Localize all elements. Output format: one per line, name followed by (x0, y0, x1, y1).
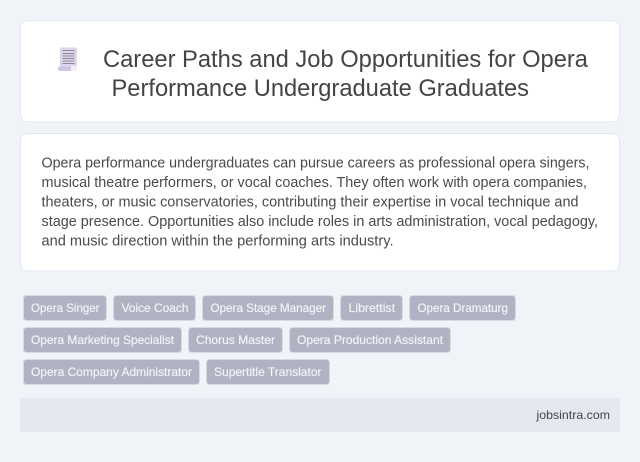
summary text: and music direction within the performing arts industry. (42, 232, 394, 250)
title: Performance Undergraduate Graduates (112, 75, 529, 102)
summary text: theaters, or music conservatories, contributing their expertise in vocal technique and (42, 194, 578, 210)
tag: Opera Dramaturg: Opera Dramaturg (418, 301, 508, 315)
title: Career Paths and Job Opportunities for Opera (103, 46, 589, 73)
tag: Chorus Master: Chorus Master (196, 333, 275, 347)
tag: Opera Dramaturg (410, 296, 516, 320)
footer source text: jobsintra.com (535, 408, 610, 422)
tag: Opera Marketing Specialist (24, 328, 182, 352)
tag: Opera Stage Manager: Opera Stage Manager (210, 301, 326, 315)
summary text: stage presence. Opportunities also include roles in arts administration, vocal pedagogy, (42, 213, 598, 230)
tag: Opera Stage Manager (202, 296, 334, 320)
summary text: musical theatre performers, or vocal coaches. They often work with opera companies, (42, 174, 587, 191)
panel: title card (20, 20, 620, 122)
job tags (24, 296, 516, 384)
tag: Opera Company Administrator (24, 360, 200, 384)
icon: paper scroll (58, 48, 77, 71)
footer bar (20, 398, 620, 432)
title (103, 46, 589, 102)
tag: Voice Coach: Voice Coach (122, 301, 188, 315)
tag: Voice Coach (114, 296, 196, 320)
tag: Librettist: Librettist (348, 301, 396, 315)
tag: Opera Singer: Opera Singer (31, 301, 100, 315)
tag: Librettist (340, 296, 402, 320)
tag: Chorus Master (188, 328, 282, 352)
summary text (42, 154, 598, 250)
panel: summary card (20, 134, 620, 271)
tag: Supertitle Translator: Supertitle Translator (214, 365, 322, 379)
tag: Opera Production Assistant (290, 328, 450, 352)
tag: Supertitle Translator (206, 360, 330, 384)
tag: Opera Singer (24, 296, 106, 320)
tag: Opera Marketing Specialist: Opera Marketing Specialist (31, 333, 175, 347)
summary text: Opera performance undergraduates can pursue careers as professional opera singers, (42, 154, 590, 172)
tag: Opera Production Assistant: Opera Production Assistant (297, 333, 444, 347)
tag: Opera Company Administrator: Opera Company Administrator (31, 365, 192, 379)
